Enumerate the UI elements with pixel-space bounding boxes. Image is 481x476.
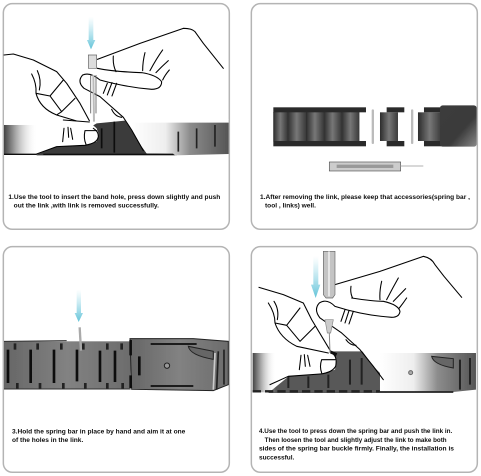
spring bar left xyxy=(372,109,374,144)
single link xyxy=(380,107,404,146)
left hand outline xyxy=(4,54,98,154)
left hand outline xyxy=(259,287,336,385)
caption: 4.Use the tool to press down the spring bar and push the link in. xyxy=(259,429,453,435)
caption xyxy=(12,430,186,444)
caption: 1.Use the tool to insert the band hole, press down slightly and push xyxy=(8,195,221,201)
caption xyxy=(259,429,455,462)
arrow down xyxy=(311,256,320,298)
caption: tool , links) well. xyxy=(265,203,316,209)
band left fade xyxy=(253,353,276,392)
caption: sides of the spring bar buckle firmly. Finally, the installation is xyxy=(259,447,455,453)
band dark centre xyxy=(268,351,387,393)
illustration: hands pushing out link xyxy=(4,17,229,155)
band left fade xyxy=(4,125,37,155)
tool xyxy=(329,162,423,171)
band right fade xyxy=(132,123,229,155)
spring bar xyxy=(80,327,81,351)
panel: step 1 remove link xyxy=(3,4,229,229)
link slots xyxy=(8,350,115,383)
illustration: hands pressing spring bar xyxy=(253,251,476,393)
tool xyxy=(323,251,335,298)
right hand outline xyxy=(97,28,223,68)
band section long xyxy=(273,107,366,146)
right hand outline xyxy=(335,256,462,297)
panel: step 4 install link xyxy=(251,247,477,472)
clasp xyxy=(130,339,228,391)
caption: out the link ,with link is removed successfully. xyxy=(14,203,159,209)
arrow down xyxy=(87,17,95,49)
caption xyxy=(260,195,470,209)
illustration: band with clasp xyxy=(4,290,228,391)
caption: successful. xyxy=(259,456,295,462)
illustration: separated band parts xyxy=(273,105,477,171)
panel: step 3 hold spring bar xyxy=(3,247,229,472)
band links xyxy=(4,341,131,389)
link and clasp xyxy=(418,105,477,147)
panel: step 2 keep accessories xyxy=(251,4,477,229)
watch band dark centre xyxy=(37,121,177,155)
clasp right fade xyxy=(380,353,476,393)
caption xyxy=(8,195,221,209)
spring bar right xyxy=(411,109,413,144)
caption: of the holes in the link. xyxy=(12,438,84,444)
caption: 3.Hold the spring bar in place by hand and aim it at one xyxy=(12,430,186,436)
tool xyxy=(88,55,97,68)
caption: Then loosen the tool and slightly adjust the link to make both xyxy=(265,438,447,444)
arrow down xyxy=(75,290,83,322)
caption: 1.After removing the link, please keep that accessories(spring bar , xyxy=(260,195,470,201)
